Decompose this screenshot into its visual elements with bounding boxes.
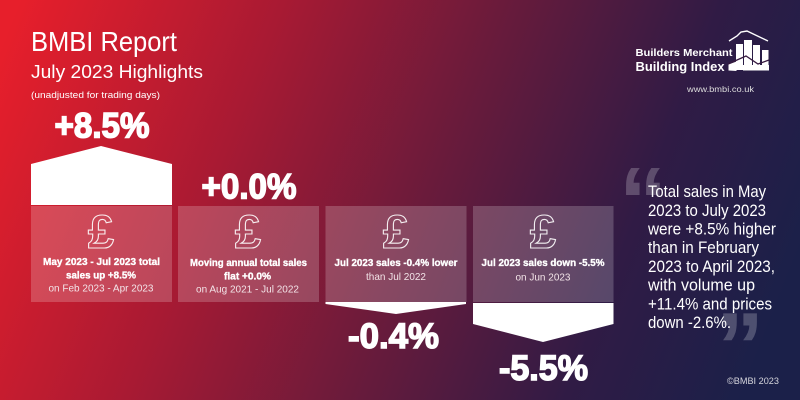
quote text: 2023 to July 2023	[648, 202, 766, 220]
value: -0.4%: -0.4%	[348, 317, 439, 356]
panel 3 text	[334, 257, 458, 283]
arrow down: -0.4%	[326, 302, 466, 314]
arrow down: -5.5%	[473, 303, 614, 342]
quote text: were +8.5% higher	[647, 220, 776, 238]
quote text: down -2.6%.	[648, 314, 731, 332]
value: -5.5%: -5.5%	[499, 349, 588, 388]
panel: Jul 2023 vs Jun 2023	[473, 205, 614, 302]
quote mark: closing: ”	[716, 293, 764, 400]
panel 4 text: on Jun 2023	[516, 272, 571, 284]
icon: pound: £	[235, 205, 261, 258]
subtitle: July 2023 Highlights	[31, 62, 203, 82]
quote text: 2023 to April 2023,	[648, 258, 775, 276]
logo wordmark: Building Index	[636, 60, 725, 74]
panel 2 text	[190, 257, 307, 296]
panel 1 text: sales up +8.5%	[66, 270, 137, 282]
arrow up: +8.5%	[31, 146, 172, 205]
icon: pound: £	[88, 205, 114, 258]
value: +0.0%: +0.0%	[202, 168, 296, 206]
quote text: Total sales in May	[648, 183, 767, 201]
panel 3 text: Jul 2023 sales -0.4% lower	[334, 257, 458, 269]
panel: Jul 2023 vs Jul 2022	[326, 205, 466, 302]
quote text	[647, 183, 776, 332]
panel: moving annual total sales	[178, 205, 319, 302]
icon: house and bars	[728, 31, 769, 71]
icon: pound: £	[383, 205, 409, 258]
logo: Builders Merchant Building Index	[636, 31, 769, 74]
panel 2 text: Moving annual total sales	[190, 257, 307, 269]
quote text: with volume up	[647, 276, 755, 294]
panel 1 text: May 2023 - Jul 2023 total	[43, 256, 160, 268]
panel 4 text	[482, 257, 605, 284]
note: unadjusted: (unadjusted for trading days)	[31, 90, 160, 101]
panel 3 text: than Jul 2022	[366, 271, 426, 283]
quote mark: opening: “	[619, 148, 667, 255]
panel 2 text: flat +0.0%	[224, 270, 272, 282]
website url: www.bmbi.co.uk	[686, 84, 755, 94]
panel 1 text: on Feb 2023 - Apr 2023	[48, 282, 154, 294]
quote text: than in February	[648, 239, 760, 257]
value: +8.5%: +8.5%	[54, 106, 150, 146]
quote text: +11.4% and prices	[648, 296, 772, 314]
icon: pound: £	[530, 205, 556, 258]
panel 1 text	[43, 256, 160, 294]
logo wordmark	[636, 47, 733, 74]
title: BMBI Report	[31, 26, 177, 57]
copyright: ©BMBI 2023	[727, 376, 779, 386]
panel 2 text: on Aug 2021 - Jul 2022	[196, 284, 299, 296]
panel: May-Jul total sales	[31, 205, 172, 302]
logo wordmark: Builders Merchant	[636, 47, 733, 59]
panel 4 text: Jul 2023 sales down -5.5%	[482, 257, 605, 269]
